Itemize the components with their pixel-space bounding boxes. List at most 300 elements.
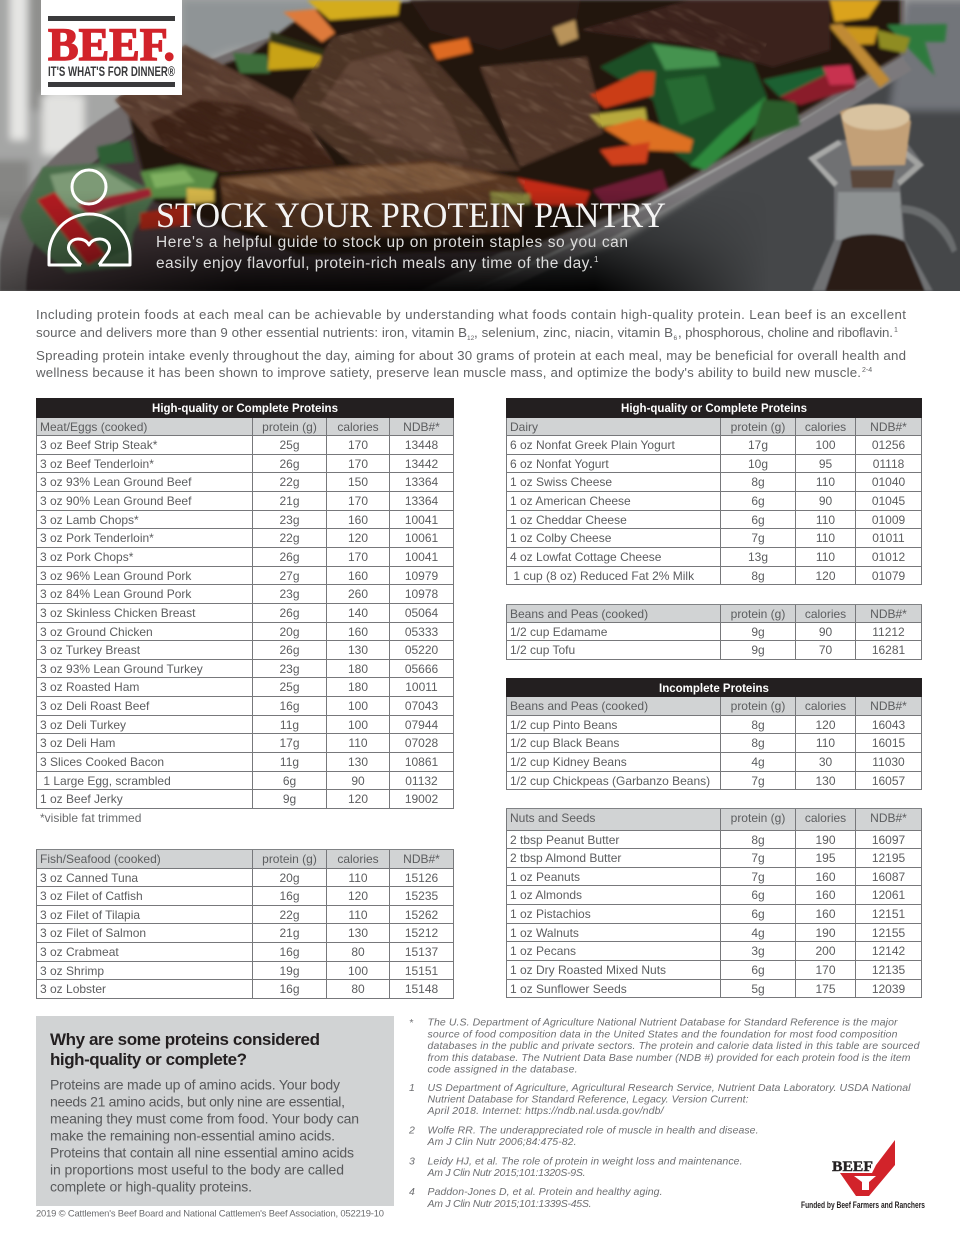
intro text: wellness because it has been shown to improve satiety, preserve lean muscle mass, and optimize the body's ability to build new muscle. xyxy=(35,365,861,380)
table: incomplete proteins, beans and peas: 1/2 cup Black Beans xyxy=(510,736,619,750)
table: meat and eggs: 1 oz Beef Jerky xyxy=(40,792,123,806)
table: dairy: 1 cup (8 oz) Reduced Fat 2% Milk xyxy=(513,569,694,583)
table: nuts and seeds: 7g xyxy=(751,870,765,884)
table: meat and eggs: 13442 xyxy=(405,457,438,471)
table title bar: High-quality or Complete Proteins xyxy=(152,403,338,415)
overlay: beef logo, icon and hero text xyxy=(41,0,666,272)
table title bar xyxy=(506,398,922,418)
table title bar xyxy=(506,678,922,697)
reference 3: 3 xyxy=(409,1156,415,1168)
table: meat and eggs: 10011 xyxy=(405,680,438,694)
table: nuts and seeds: 16097 xyxy=(872,832,905,846)
panel body text: needs 21 amino acids, but only nine are essential, xyxy=(50,1094,345,1110)
table: dairy: 1 oz American Cheese xyxy=(510,494,631,508)
table: meat and eggs: 05064 xyxy=(405,606,438,620)
table: beans and peas, complete: 1/2 cup Edamame xyxy=(510,624,607,638)
reference 1: 1 xyxy=(409,1082,415,1094)
column headers: protein (g) xyxy=(731,811,785,825)
column headers: Beans and Peas (cooked) xyxy=(510,699,648,713)
table: meat and eggs: 26g xyxy=(279,457,300,471)
intro text: 1 xyxy=(894,327,898,334)
table: beans and peas, complete: 11212 xyxy=(872,624,905,638)
table: meat and eggs: 01132 xyxy=(405,774,438,788)
reference 4: Am J Clin Nutr 2015;101:1339S-45S. xyxy=(426,1198,592,1210)
table: incomplete proteins, beans and peas: 1/2 cup Chickpeas (Garbanzo Beans) xyxy=(510,774,710,788)
table: nuts and seeds: 8g xyxy=(751,832,765,846)
table: meat and eggs: 23g xyxy=(279,662,300,676)
reference 2: Am J Clin Nutr 2006;84:475-82. xyxy=(426,1136,576,1148)
reference: asterisk: The U.S. Department of Agriculture National Nutrient Database for Standard Reference is the major xyxy=(428,1016,898,1028)
table: meat and eggs: 3 Slices Cooked Bacon xyxy=(40,755,164,769)
table: dairy: 01118 xyxy=(873,457,904,471)
table: nuts and seeds: 1 oz Almonds xyxy=(510,888,582,902)
table: meat and eggs: 10978 xyxy=(405,587,438,601)
column headers: protein (g) xyxy=(731,699,785,713)
table: fish and seafood: 16g xyxy=(279,889,300,903)
table: dairy: 100 xyxy=(815,438,836,452)
table: meat and eggs: 170 xyxy=(348,494,368,508)
table: dairy: 95 xyxy=(819,457,832,471)
table: meat and eggs: 3 oz Turkey Breast xyxy=(40,643,140,657)
table: dairy: 1 oz Swiss Cheese xyxy=(510,475,612,489)
table: meat and eggs: 3 oz 84% Lean Ground Pork xyxy=(40,587,191,601)
table: nuts and seeds xyxy=(506,808,922,998)
column headers: protein (g) xyxy=(731,420,785,434)
column headers: protein (g) xyxy=(262,852,317,866)
column headers: calories xyxy=(805,606,846,620)
grilled beef pieces xyxy=(115,45,335,172)
table: fish and seafood: 15262 xyxy=(405,908,438,922)
panel body text: make the remaining non-essential amino acids. xyxy=(50,1128,335,1144)
table: meat and eggs: 19002 xyxy=(405,792,438,806)
table: meat and eggs: 3 oz Pork Tenderloin* xyxy=(40,531,154,545)
subtitle: easily enjoy flavorful, protein-rich meals any time of the day. xyxy=(156,255,593,272)
intro text: 12 xyxy=(467,335,475,342)
table: meat and eggs: 150 xyxy=(348,475,368,489)
table: meat and eggs: 07944 xyxy=(405,718,438,732)
table: meat and eggs: 9g xyxy=(283,792,296,806)
table: fish and seafood: 15137 xyxy=(405,945,438,959)
reference 2: Wolfe RR. The underappreciated role of muscle in health and disease. xyxy=(428,1124,758,1136)
subtitle: 1 xyxy=(594,255,599,264)
table: meat and eggs: 25g xyxy=(279,680,300,694)
table: dairy: 90 xyxy=(819,494,832,508)
table: meat and eggs: 260 xyxy=(348,587,368,601)
table: fish and seafood: 3 oz Filet of Catfish xyxy=(40,889,143,903)
column headers xyxy=(506,418,922,436)
panel heading xyxy=(50,1030,320,1069)
table: meat and eggs: 05333 xyxy=(405,625,438,639)
intro text: 6 xyxy=(674,335,678,342)
table: meat and eggs: 17g xyxy=(279,736,300,750)
meat and vegetables xyxy=(20,0,947,273)
reference 3: Leidy HJ, et al. The role of protein in weight loss and maintenance. xyxy=(428,1156,742,1168)
table: dairy: 4 oz Lowfat Cottage Cheese xyxy=(510,550,661,564)
table: meat and eggs: 10861 xyxy=(405,755,438,769)
table: meat and eggs: 05666 xyxy=(405,662,438,676)
logo: Beef. It's What's For Dinner: BEEF. xyxy=(48,19,175,71)
table: meat and eggs: 26g xyxy=(279,643,300,657)
table: meat and eggs: 25g xyxy=(279,438,300,452)
table: dairy: 10g xyxy=(748,457,768,471)
table: dairy: 17g xyxy=(748,438,768,452)
table: dairy: 6g xyxy=(751,494,765,508)
table: meat and eggs: 180 xyxy=(348,662,368,676)
table: nuts and seeds: 1 oz Peanuts xyxy=(510,870,580,884)
table: nuts and seeds: 5g xyxy=(751,982,765,996)
table: meat and eggs: 120 xyxy=(348,531,368,545)
table: nuts and seeds: 6g xyxy=(751,963,765,977)
table: fish and seafood: 15212 xyxy=(405,926,438,940)
table: fish and seafood: 16g xyxy=(279,982,300,996)
table: meat and eggs: 3 oz 93% Lean Ground Turkey xyxy=(40,662,203,676)
table: nuts and seeds: 160 xyxy=(815,888,836,902)
table: fish and seafood: 20g xyxy=(279,870,300,884)
table: meat and eggs: 05220 xyxy=(405,643,438,657)
dark text shade xyxy=(0,196,748,291)
table: meat and eggs: 160 xyxy=(348,625,368,639)
table: nuts and seeds: 7g xyxy=(751,851,765,865)
reference 4: 4 xyxy=(409,1186,415,1198)
panel body text: in proportions most useful to the body are called xyxy=(50,1162,344,1178)
reference: asterisk: code assigned in the database. xyxy=(428,1064,578,1076)
table: nuts and seeds: 3g xyxy=(751,944,765,958)
table: dairy: 6g xyxy=(751,513,765,527)
table: meat and eggs: 3 oz Deli Roast Beef xyxy=(40,699,149,713)
table: meat and eggs: 27g xyxy=(279,569,300,583)
table: dairy: 01256 xyxy=(872,438,905,452)
column headers: NDB#* xyxy=(870,699,907,713)
table: meat and eggs: 10061 xyxy=(405,531,438,545)
table: nuts and seeds: 195 xyxy=(815,851,836,865)
table: dairy: 110 xyxy=(816,550,835,564)
column headers: calories xyxy=(805,420,846,434)
reference 3: Am J Clin Nutr 2015;101:1320S-9S. xyxy=(426,1167,586,1179)
table: meat and eggs: 3 oz Ground Chicken xyxy=(40,625,153,639)
panel body text: Proteins that contain all nine essential amino acids xyxy=(50,1144,354,1160)
table: dairy: 01079 xyxy=(872,569,905,583)
table: nuts and seeds: 1 oz Sunflower Seeds xyxy=(510,982,627,996)
footnote: visible fat trimmed: *visible fat trimmed xyxy=(40,811,141,825)
column headers: calories xyxy=(805,699,846,713)
table: meat and eggs: 120 xyxy=(348,792,368,806)
panel body text: complete or high-quality proteins. xyxy=(50,1178,252,1194)
red chard stems and peppers xyxy=(593,170,668,205)
table: fish and seafood: 16g xyxy=(279,945,300,959)
table: meat and eggs: 170 xyxy=(348,438,368,452)
table: incomplete proteins, beans and peas: 11030 xyxy=(872,755,905,769)
table: incomplete proteins, beans and peas: 130 xyxy=(815,774,836,788)
table: meat and eggs: 26g xyxy=(279,606,300,620)
table: incomplete proteins, beans and peas: 16015 xyxy=(872,736,905,750)
intro text: 2-4 xyxy=(862,367,872,374)
table: dairy: 6 oz Nonfat Yogurt xyxy=(510,457,609,471)
table: fish and seafood: 130 xyxy=(348,926,368,940)
table: meat and eggs: 3 oz 93% Lean Ground Beef xyxy=(40,475,191,489)
intro text: , phosphorous, choline and riboflavin. xyxy=(678,325,893,340)
column headers: NDB#* xyxy=(870,606,907,620)
reference 4 xyxy=(409,1186,662,1210)
table: nuts and seeds: 190 xyxy=(815,832,836,846)
table title bar: Incomplete Proteins xyxy=(659,683,769,695)
table: incomplete proteins, beans and peas: 1/2 cup Kidney Beans xyxy=(510,755,627,769)
table: beans and peas, complete xyxy=(506,604,922,660)
table: meat and eggs: 16g xyxy=(279,699,300,713)
table: meat and eggs: 130 xyxy=(348,643,368,657)
column headers xyxy=(506,808,922,830)
oil bottle with cork xyxy=(808,104,957,291)
subtitle: Here's a helpful guide to stock up on protein staples so you can xyxy=(156,234,628,251)
table: incomplete proteins, beans and peas: 7g xyxy=(751,774,765,788)
table background and fork xyxy=(0,0,960,310)
table: meat and eggs: 3 oz Pork Chops* xyxy=(40,550,133,564)
table: fish and seafood: 3 oz Crabmeat xyxy=(40,945,119,959)
table: meat and eggs: 110 xyxy=(348,736,368,750)
table: beans and peas, complete: 9g xyxy=(751,624,765,638)
table: meat and eggs: 10979 xyxy=(405,569,438,583)
table: meat and eggs: 170 xyxy=(348,550,368,564)
table: nuts and seeds: 12142 xyxy=(872,944,905,958)
table: beans and peas, complete: 9g xyxy=(751,643,765,657)
table: incomplete proteins, beans and peas: 16043 xyxy=(872,718,905,732)
table: nuts and seeds: 1 oz Pecans xyxy=(510,944,576,958)
logo: beef check funded by farmers: BEEF xyxy=(832,1159,873,1175)
column headers: calories xyxy=(337,852,379,866)
table: incomplete proteins, beans and peas: 16057 xyxy=(872,774,905,788)
table: incomplete proteins, beans and peas: 8g xyxy=(751,736,765,750)
reference 3 xyxy=(409,1156,742,1179)
table: meat and eggs: 6g xyxy=(283,774,296,788)
table: fish and seafood: 15148 xyxy=(405,982,438,996)
table: meat and eggs: 100 xyxy=(348,718,368,732)
table: nuts and seeds: 190 xyxy=(815,926,836,940)
table: meat and eggs: 3 oz Deli Turkey xyxy=(40,718,126,732)
table: meat and eggs: 11g xyxy=(280,718,299,732)
table: fish and seafood: 21g xyxy=(279,926,300,940)
table: meat and eggs xyxy=(36,398,454,809)
table: fish and seafood: 80 xyxy=(351,982,365,996)
table: meat and eggs: 23g xyxy=(279,513,300,527)
table: fish and seafood: 3 oz Lobster xyxy=(40,982,106,996)
column headers: NDB#* xyxy=(403,420,440,434)
table: meat and eggs: 13448 xyxy=(405,438,438,452)
table: meat and eggs: 90 xyxy=(351,774,365,788)
table: beans and peas, complete: 90 xyxy=(819,624,832,638)
table: dairy: 13g xyxy=(748,550,768,564)
logo: beef check funded by farmers xyxy=(801,1140,925,1210)
table: incomplete proteins, beans and peas: 110 xyxy=(816,736,835,750)
title: STOCK YOUR PROTEIN PANTRY xyxy=(156,195,666,235)
table: meat and eggs: 160 xyxy=(348,569,368,583)
table: meat and eggs: 3 oz 96% Lean Ground Pork xyxy=(40,569,191,583)
panel body text: Proteins are made up of amino acids. Your body xyxy=(50,1076,340,1092)
column headers xyxy=(36,849,454,868)
table: meat and eggs: 170 xyxy=(348,457,368,471)
column headers xyxy=(36,418,454,436)
table: meat and eggs: 100 xyxy=(348,699,368,713)
column headers xyxy=(506,697,922,716)
table: meat and eggs: 07028 xyxy=(405,736,438,750)
serving plate xyxy=(0,0,912,291)
hero photo banner xyxy=(0,0,960,291)
table: fish and seafood: 80 xyxy=(351,945,365,959)
table: meat and eggs: 180 xyxy=(348,680,368,694)
table: nuts and seeds: 170 xyxy=(815,963,836,977)
table: meat and eggs: 140 xyxy=(348,606,368,620)
table title bar xyxy=(36,398,454,418)
table: fish and seafood xyxy=(36,849,454,999)
subtitle xyxy=(156,234,628,272)
column headers: NDB#* xyxy=(870,811,907,825)
table: meat and eggs: 10041 xyxy=(405,550,438,564)
panel heading: high-quality or complete? xyxy=(50,1050,247,1069)
intro text: , selenium, zinc, niacin, vitamin B xyxy=(474,325,673,340)
table: meat and eggs: 11g xyxy=(280,755,299,769)
table: nuts and seeds: 2 tbsp Peanut Butter xyxy=(510,832,619,846)
table: meat and eggs: 13364 xyxy=(405,494,438,508)
table: nuts and seeds: 2 tbsp Almond Butter xyxy=(510,851,621,865)
column headers: Dairy xyxy=(510,420,538,434)
column headers xyxy=(506,604,922,622)
column headers: calories xyxy=(805,811,846,825)
table: dairy: 01040 xyxy=(872,475,905,489)
table: meat and eggs: 3 oz 90% Lean Ground Beef xyxy=(40,494,191,508)
column headers: NDB#* xyxy=(403,852,440,866)
table: dairy: 120 xyxy=(815,569,836,583)
reference 1: US Department of Agriculture, Agricultural Research Service, Nutrient Data Laboratory. USDA National xyxy=(428,1082,911,1094)
logo: Beef. It's What's For Dinner: IT'S WHAT'S FOR DINNER® xyxy=(48,63,175,79)
table: fish and seafood: 100 xyxy=(348,964,368,978)
reference 1: Nutrient Database for Standard Reference, Legacy. Version Current: xyxy=(428,1094,749,1106)
column headers: NDB#* xyxy=(870,420,907,434)
table: incomplete proteins, beans and peas: 30 xyxy=(819,755,832,769)
panel heading: Why are some proteins considered xyxy=(50,1030,320,1049)
table: fish and seafood: 15235 xyxy=(405,889,438,903)
table: fish and seafood: 120 xyxy=(348,889,368,903)
table: incomplete proteins, beans and peas: 4g xyxy=(751,755,765,769)
table: nuts and seeds: 160 xyxy=(815,870,836,884)
reference 1 xyxy=(409,1082,911,1117)
column headers: Nuts and Seeds xyxy=(510,811,595,825)
table: nuts and seeds: 1 oz Pistachios xyxy=(510,907,591,921)
table: fish and seafood: 3 oz Canned Tuna xyxy=(40,870,138,884)
reference: asterisk: source of food composition data in the United States and the foundation for most food composition xyxy=(428,1028,898,1040)
left chard leaf xyxy=(20,163,157,273)
big green leaf xyxy=(600,43,767,167)
table: beans and peas, complete: 1/2 cup Tofu xyxy=(510,643,575,657)
table: dairy: 1 oz Colby Cheese xyxy=(510,531,611,545)
table: fish and seafood: 3 oz Filet of Tilapia xyxy=(40,908,140,922)
table: nuts and seeds: 4g xyxy=(751,926,765,940)
panel body text: meaning they must come from food. Your body can xyxy=(50,1110,359,1126)
table: incomplete proteins, beans and peas xyxy=(506,678,922,790)
table: fish and seafood: 22g xyxy=(279,908,300,922)
table: dairy: 110 xyxy=(816,475,835,489)
table: meat and eggs: 20g xyxy=(279,625,300,639)
meat grill texture xyxy=(116,6,766,236)
table: meat and eggs: 1 Large Egg, scrambled xyxy=(43,774,171,788)
reference: asterisk: databases in the public and private sectors. The protein and calorie data listed in this table are sourced xyxy=(428,1040,921,1052)
table: meat and eggs: 26g xyxy=(279,550,300,564)
table: meat and eggs: 07043 xyxy=(405,699,438,713)
table: fish and seafood: 3 oz Shrimp xyxy=(40,964,104,978)
table: dairy: 8g xyxy=(751,569,765,583)
yellow squash and orange peppers xyxy=(307,0,400,20)
table: dairy: 1 oz Cheddar Cheese xyxy=(510,513,627,527)
intro text: source and delivers more than 9 other essential nutrients: iron, vitamin B xyxy=(36,325,467,340)
table: meat and eggs: 3 oz Roasted Ham xyxy=(40,680,139,694)
table: dairy: 01009 xyxy=(872,513,905,527)
table: meat and eggs: 23g xyxy=(279,587,300,601)
table: fish and seafood: 3 oz Filet of Salmon xyxy=(40,926,146,940)
table: nuts and seeds: 200 xyxy=(815,944,836,958)
table: meat and eggs: 130 xyxy=(348,755,368,769)
reference 1: April 2018. Internet: https://ndb.nal.usda.gov/ndb/ xyxy=(426,1105,665,1117)
intro text: Spreading protein intake evenly throughout the day, aiming for about 30 grams of protein at each meal, may be beneficial for overall health and xyxy=(36,348,906,363)
reference: asterisk: * xyxy=(409,1017,414,1029)
table: nuts and seeds: 160 xyxy=(815,907,836,921)
table: incomplete proteins, beans and peas: 8g xyxy=(751,718,765,732)
references xyxy=(408,1016,925,1210)
table: meat and eggs: 22g xyxy=(279,475,300,489)
table: beans and peas, complete: 70 xyxy=(819,643,832,657)
intro text: Including protein foods at each meal can be achievable by understanding what foods contain high-quality protein. Lean beef is an excellent xyxy=(36,307,906,322)
table: fish and seafood: 110 xyxy=(348,870,368,884)
table: nuts and seeds: 1 oz Dry Roasted Mixed Nuts xyxy=(510,963,666,977)
column headers: Meat/Eggs (cooked) xyxy=(40,420,147,434)
table: fish and seafood: 15126 xyxy=(405,870,438,884)
reference 2: 2 xyxy=(408,1124,415,1136)
table: incomplete proteins, beans and peas: 1/2 cup Pinto Beans xyxy=(510,718,617,732)
table: meat and eggs: 10041 xyxy=(405,513,438,527)
table: nuts and seeds: 12061 xyxy=(872,888,905,902)
column headers: Beans and Peas (cooked) xyxy=(510,606,648,620)
table: fish and seafood: 110 xyxy=(348,908,368,922)
table: fish and seafood: 15151 xyxy=(405,964,438,978)
panel: why are some proteins high-quality xyxy=(36,1016,394,1218)
reference: asterisk xyxy=(409,1016,921,1076)
reference 4: Paddon-Jones D, et al. Protein and healthy aging. xyxy=(428,1186,662,1198)
table: dairy xyxy=(506,398,922,585)
table: fish and seafood: 19g xyxy=(279,964,300,978)
table: nuts and seeds: 12195 xyxy=(872,851,905,865)
table: meat and eggs: 3 oz Skinless Chicken Breast xyxy=(40,606,195,620)
column headers: calories xyxy=(337,420,379,434)
table: meat and eggs: 3 oz Lamb Chops* xyxy=(40,513,139,527)
table: dairy: 01045 xyxy=(872,494,905,508)
copyright line: 2019 © Cattlemen's Beef Board and National Cattlemen's Beef Association, 052219-10 xyxy=(36,1208,384,1218)
table: dairy: 6 oz Nonfat Greek Plain Yogurt xyxy=(510,438,675,452)
table: nuts and seeds: 12039 xyxy=(872,982,905,996)
table: dairy: 01011 xyxy=(872,531,905,545)
table: meat and eggs: 3 oz Beef Strip Steak* xyxy=(40,438,157,452)
table: nuts and seeds: 1 oz Walnuts xyxy=(510,926,579,940)
table: beans and peas, complete: 16281 xyxy=(872,643,905,657)
table: meat and eggs: 160 xyxy=(348,513,368,527)
column headers: protein (g) xyxy=(731,606,785,620)
table title bar: High-quality or Complete Proteins xyxy=(621,403,807,415)
table: nuts and seeds: 6g xyxy=(751,888,765,902)
table: meat and eggs: 3 oz Beef Tenderloin* xyxy=(40,457,154,471)
reference: asterisk: from this database. The Nutrient Data Base number (NDB #) provided for each protein food is the item xyxy=(428,1052,911,1064)
table: dairy: 110 xyxy=(816,513,835,527)
table: nuts and seeds: 12155 xyxy=(872,926,905,940)
table: nuts and seeds: 12135 xyxy=(872,963,905,977)
table: dairy: 110 xyxy=(816,531,835,545)
table: nuts and seeds: 6g xyxy=(751,907,765,921)
column headers: Fish/Seafood (cooked) xyxy=(40,852,161,866)
icon: person with heart xyxy=(49,170,130,265)
